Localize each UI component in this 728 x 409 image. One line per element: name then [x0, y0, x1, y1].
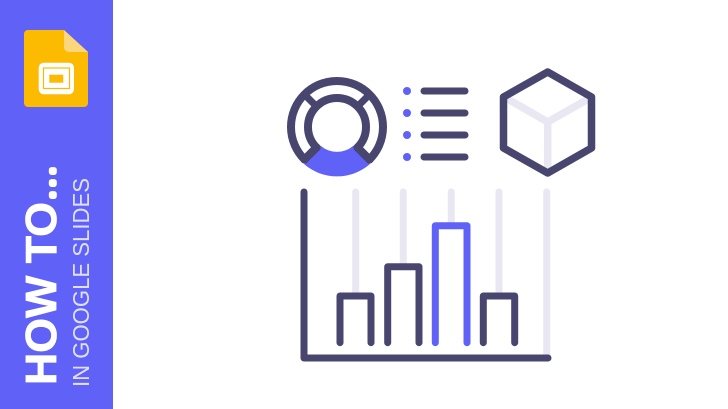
heading: how to: HOW TO: [17, 202, 66, 385]
list: bullets and lines: [403, 87, 465, 161]
icon: donut chart: [291, 81, 383, 176]
chart: bar chart: [304, 192, 548, 358]
heading: how to: ...: [41, 161, 58, 197]
panel: sidebar: [0, 0, 113, 409]
icon: cube: [504, 72, 592, 173]
icon: Google Slides file: [24, 30, 88, 107]
subheading: in google slides: IN GOOGLE SLIDES: [68, 178, 94, 387]
